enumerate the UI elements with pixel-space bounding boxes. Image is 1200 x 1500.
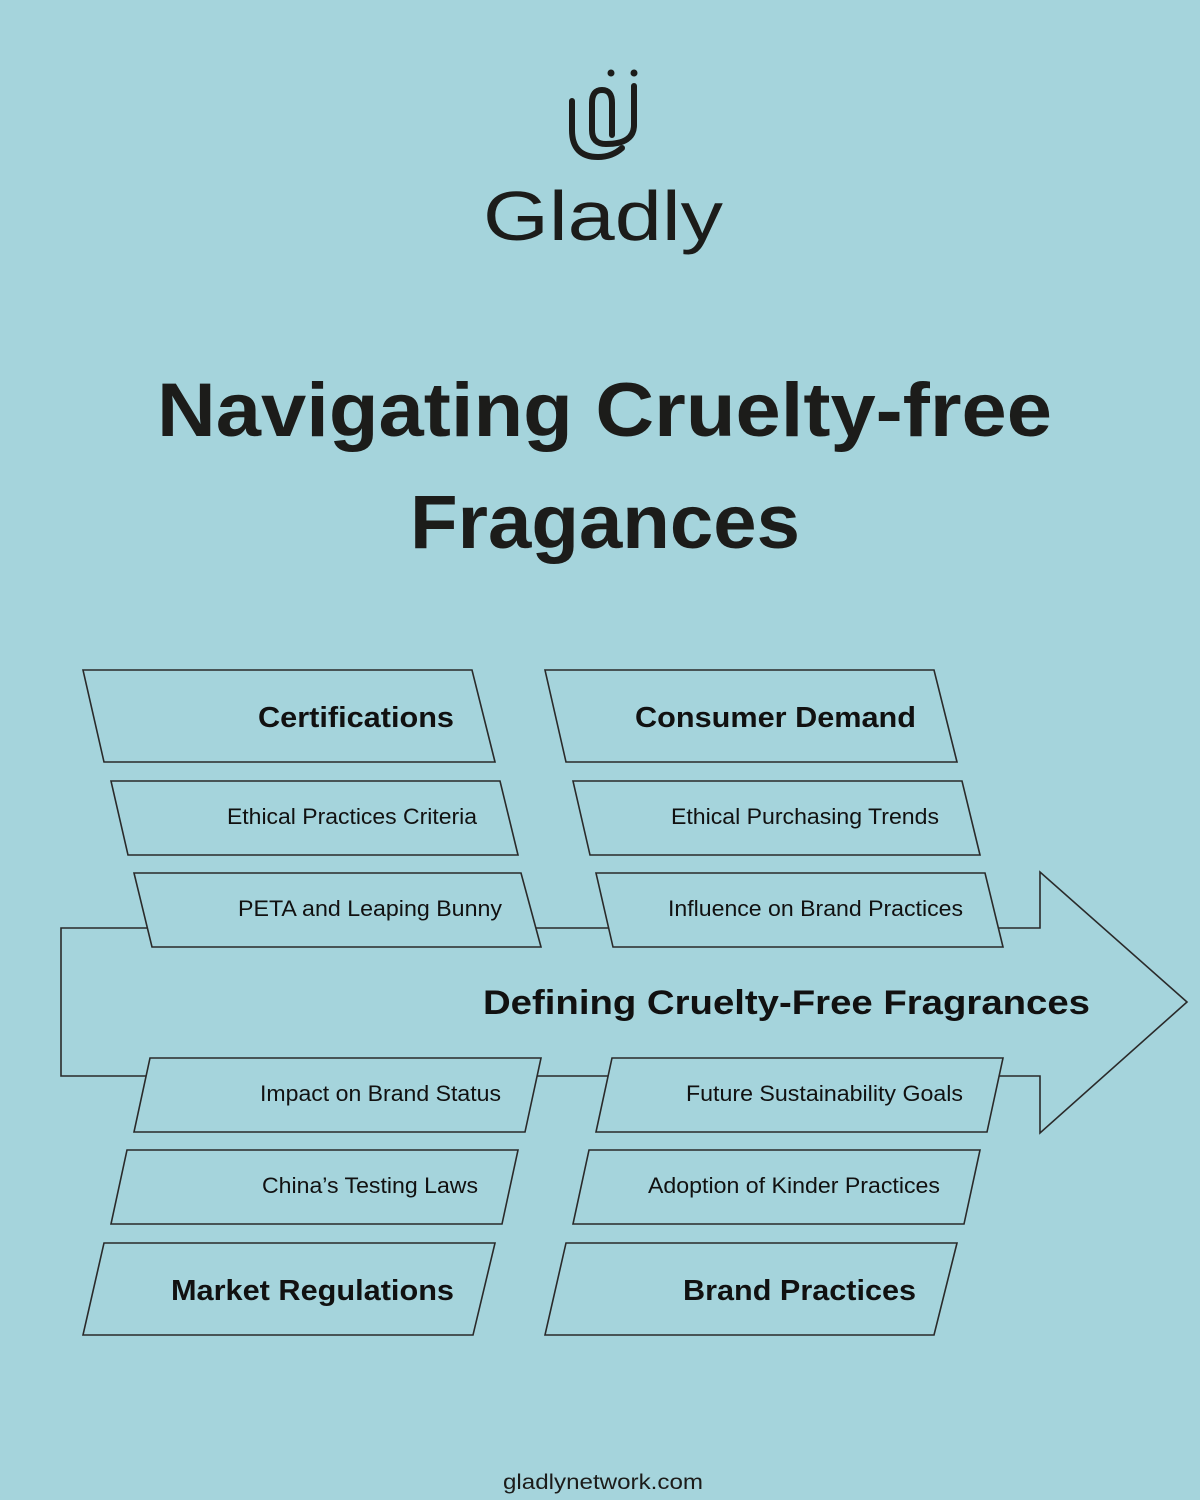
box: influence on brand practices bbox=[596, 873, 1003, 947]
box: future sustainability goals: Future Sustainability Goals bbox=[686, 1081, 963, 1106]
box: peta and leaping bunny bbox=[134, 873, 541, 947]
box: peta and leaping bunny: PETA and Leaping Bunny bbox=[238, 896, 502, 921]
panel: market regulations header: Market Regulations bbox=[171, 1275, 454, 1307]
title: Navigating Cruelty-free bbox=[157, 368, 1052, 453]
fishbone diagram bbox=[61, 670, 1187, 1335]
arrow: main spine bbox=[61, 872, 1187, 1133]
box: ethical purchasing trends bbox=[573, 781, 980, 855]
box: ethical practices criteria bbox=[111, 781, 518, 855]
title bbox=[157, 368, 1052, 565]
box: impact on brand status: Impact on Brand Status bbox=[260, 1081, 501, 1106]
box: china's testing laws bbox=[111, 1150, 518, 1224]
box: future sustainability goals bbox=[596, 1058, 1003, 1132]
panel: brand practices header bbox=[545, 1243, 957, 1335]
box: china's testing laws: China’s Testing Laws bbox=[262, 1173, 478, 1198]
footer url: gladlynetwork.com bbox=[503, 1471, 703, 1494]
title: Fragances bbox=[410, 480, 800, 565]
arrow: main spine: Defining Cruelty-Free Fragrances bbox=[483, 984, 1090, 1022]
box: ethical practices criteria: Ethical Practices Criteria bbox=[227, 804, 478, 829]
box: influence on brand practices: Influence on Brand Practices bbox=[668, 896, 963, 921]
box: impact on brand status bbox=[134, 1058, 541, 1132]
panel: certifications header: Certifications bbox=[258, 702, 454, 734]
box: adoption of kinder practices bbox=[573, 1150, 980, 1224]
box: ethical purchasing trends: Ethical Purchasing Trends bbox=[671, 804, 939, 829]
icon: gladly logo mark bbox=[572, 70, 638, 157]
panel: consumer demand header: Consumer Demand bbox=[635, 702, 916, 734]
panel: market regulations header bbox=[83, 1243, 495, 1335]
panel: brand practices header: Brand Practices bbox=[683, 1275, 916, 1307]
panel: consumer demand header bbox=[545, 670, 957, 762]
panel: certifications header bbox=[83, 670, 495, 762]
box: adoption of kinder practices: Adoption of Kinder Practices bbox=[648, 1173, 940, 1198]
logo wordmark: Gladly bbox=[483, 177, 723, 255]
